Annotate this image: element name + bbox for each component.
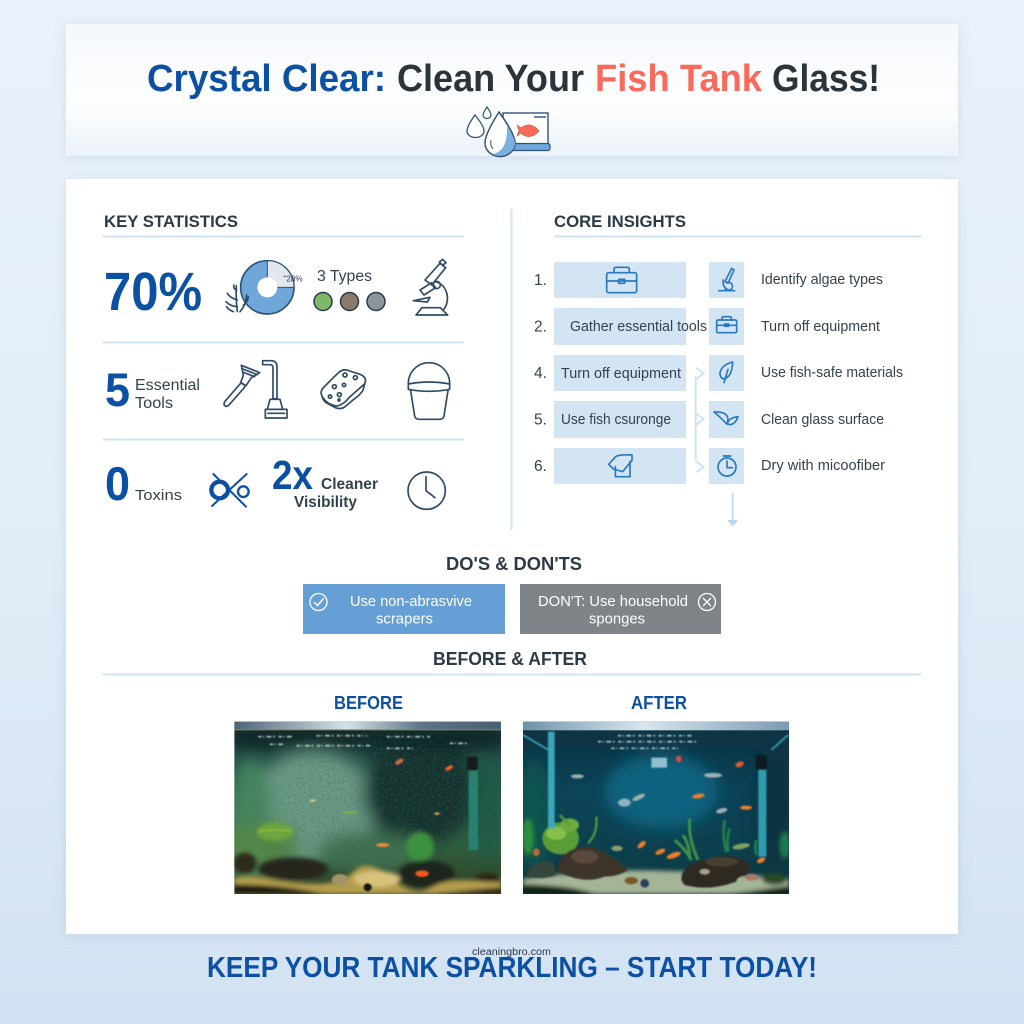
footer call to action: KEEP YOUR TANK SPARKLING – START TODAY! (207, 952, 817, 984)
stat: 5 essential tools: 5 (105, 363, 130, 416)
don't card: sponges (589, 610, 645, 628)
icon: vacuum siphon (263, 361, 287, 418)
step labels in left boxes: Turn off equipment (561, 366, 681, 382)
heading: before and after: BEFORE & AFTER (433, 648, 587, 669)
stat: 70%: 70% (104, 262, 202, 322)
step labels in left boxes (561, 319, 707, 428)
step numbers: 1. (534, 272, 547, 289)
icon: bucket (408, 363, 450, 419)
watermark: cleaningbro.com (472, 947, 551, 958)
icon: scraper (224, 365, 260, 406)
step numbers: 6. (534, 458, 547, 475)
title: Glass! (772, 58, 880, 100)
panel: core insights (534, 212, 921, 527)
step numbers (534, 272, 547, 475)
chart: algae donut with seaweed: "28% (283, 274, 303, 284)
do card: Use non-abrasvive (350, 593, 472, 610)
connector chevrons (696, 368, 704, 472)
title (147, 58, 880, 100)
don't card (520, 584, 721, 634)
heading: key statistics: KEY STATISTICS (104, 212, 238, 231)
right column labels: Identify algae types (761, 272, 883, 288)
stat: 0 toxins: 0 (105, 457, 130, 510)
stat: 0 toxins: Toxins (135, 487, 182, 504)
icons in insight boxes (607, 267, 738, 477)
right column labels (761, 272, 903, 474)
icon: water drops and fish tank (467, 107, 550, 156)
right column labels: Use fish-safe materials (761, 365, 903, 381)
step numbers: 2. (534, 318, 547, 336)
right column labels: Turn off equipment (761, 319, 880, 335)
photo: dirty aquarium before cleaning (220, 722, 502, 894)
title: Crystal Clear: (147, 58, 386, 100)
label: after: AFTER (631, 693, 687, 713)
step numbers: 4. (534, 365, 547, 382)
heading: core insights: CORE INSIGHTS (554, 212, 686, 231)
icon: three algae swatches (314, 292, 385, 310)
stat: 5 essential tools: Essential (135, 377, 200, 394)
step numbers: 5. (534, 412, 547, 428)
photo: clean aquarium after cleaning (518, 722, 795, 894)
step labels in left boxes: Use fish csuronge (561, 412, 671, 428)
stat: 2x cleaner visibility (272, 452, 378, 511)
heading: do's and don'ts: DO'S & DON'TS (446, 553, 582, 574)
icon: clock (408, 472, 445, 509)
title: Fish Tank (595, 58, 763, 100)
panel: key statistics (103, 212, 464, 511)
chart: algae donut with seaweed (226, 261, 303, 314)
stat: 5 essential tools (105, 363, 200, 416)
do card (303, 584, 505, 634)
stat: 5 essential tools: Tools (135, 395, 173, 412)
stat: 2x cleaner visibility: Visibility (294, 494, 357, 511)
label: before: BEFORE (334, 693, 403, 713)
label: 3 types: 3 Types (317, 268, 372, 285)
stat: 0 toxins (105, 457, 182, 510)
main content panel (66, 179, 958, 934)
don't card: DON'T: Use household (538, 593, 688, 610)
icon: sponge (321, 370, 366, 409)
right column labels: Dry with micoofiber (761, 458, 885, 474)
icon: no toxins crossed out (211, 474, 249, 507)
divider between statistics and insights (510, 209, 512, 530)
stat: 2x cleaner visibility: 2x (272, 452, 313, 498)
step labels in left boxes: Gather essential tools (570, 319, 707, 335)
header panel (66, 24, 958, 156)
stat: 2x cleaner visibility: Cleaner (321, 476, 378, 493)
panel: before and after (103, 648, 921, 894)
right column labels: Clean glass surface (761, 412, 884, 428)
insight boxes (554, 262, 744, 484)
do card: scrapers (376, 610, 433, 628)
panel: do's and don'ts (303, 553, 721, 634)
arrow: continue down (727, 493, 738, 527)
title: Clean Your (397, 58, 584, 100)
icon: microscope (413, 259, 448, 315)
